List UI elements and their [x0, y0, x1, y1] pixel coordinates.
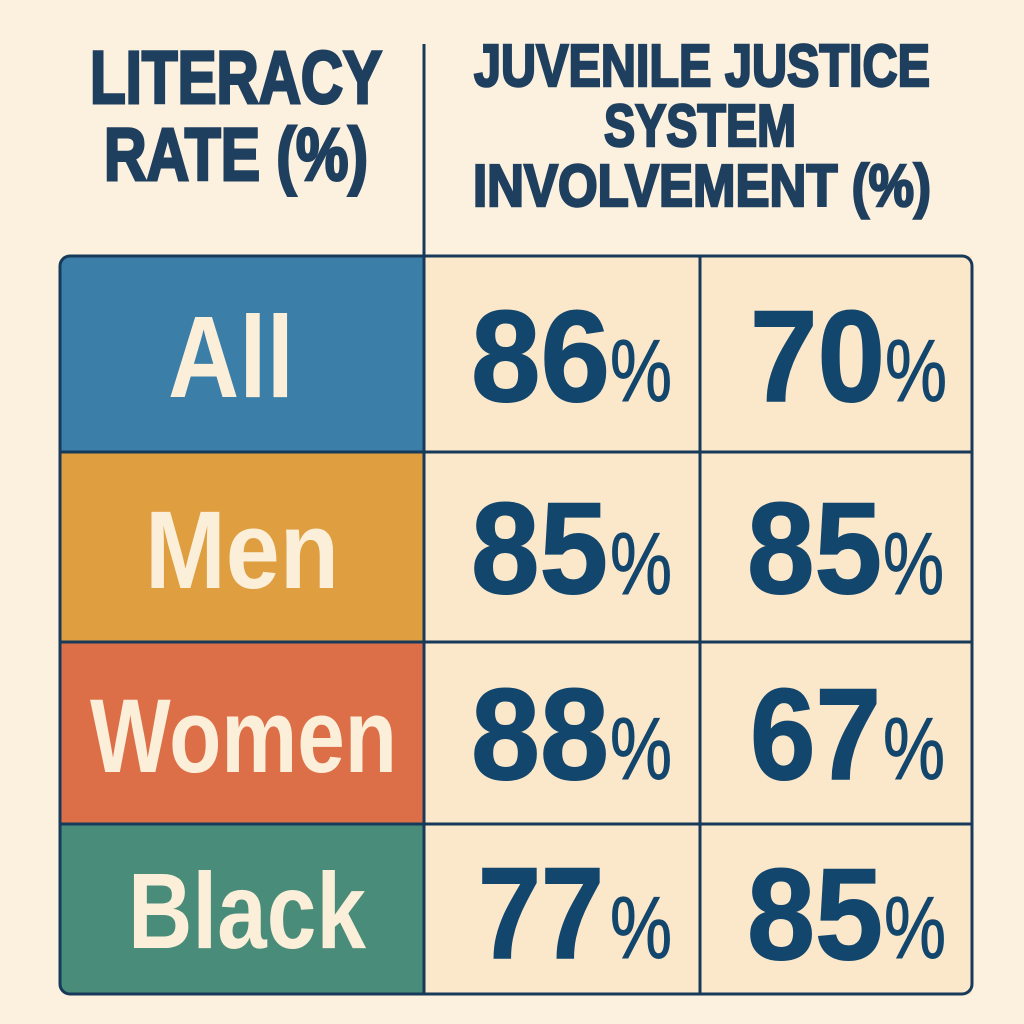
value: All juvenile 70%: %	[885, 321, 947, 420]
header: literacy rate: RATE (%)	[104, 113, 368, 196]
value: Men literacy 85%: 85	[471, 475, 608, 621]
value: Women literacy 88%: 88	[471, 661, 609, 807]
row label: Men: Men	[145, 489, 339, 612]
value: Men literacy 85%: %	[610, 514, 672, 613]
header divider	[422, 44, 426, 256]
value: Black juvenile 85%: 85	[747, 841, 883, 987]
value: All juvenile 70%: 70	[750, 283, 885, 429]
header: juvenile justice system involvement: JUVENILE JUSTICE	[474, 33, 930, 99]
header: juvenile justice system involvement	[473, 33, 931, 219]
value: Men juvenile 85%: %	[883, 514, 944, 613]
value: Black literacy 77%: 77	[478, 840, 604, 986]
table	[60, 256, 972, 994]
header: literacy rate: LITERACY	[90, 36, 382, 119]
row label: Black	[60, 824, 424, 994]
value: Black literacy 77%: %	[610, 878, 672, 977]
row label: All: All	[168, 292, 294, 422]
row label: All	[60, 256, 424, 452]
value: Women juvenile 67%: 67	[750, 661, 881, 807]
header: juvenile justice system involvement: INVOLVEMENT (%)	[473, 153, 931, 219]
row label: Black: Black	[128, 850, 367, 971]
value: Women juvenile 67%: %	[883, 699, 945, 798]
value: Black juvenile 85%: %	[884, 878, 946, 977]
table grid	[60, 256, 972, 994]
value: Women literacy 88%: %	[610, 699, 672, 798]
row label: Women: Women	[90, 678, 397, 795]
header: literacy rate	[90, 36, 382, 196]
row label: Men	[60, 452, 424, 642]
value: Men juvenile 85%: 85	[747, 475, 882, 621]
data cells background	[424, 256, 972, 994]
value: All literacy 86%: %	[610, 321, 672, 420]
row label: Women	[60, 642, 424, 824]
header: juvenile justice system involvement: SYSTEM	[604, 93, 796, 159]
value: All literacy 86%: 86	[471, 283, 610, 429]
